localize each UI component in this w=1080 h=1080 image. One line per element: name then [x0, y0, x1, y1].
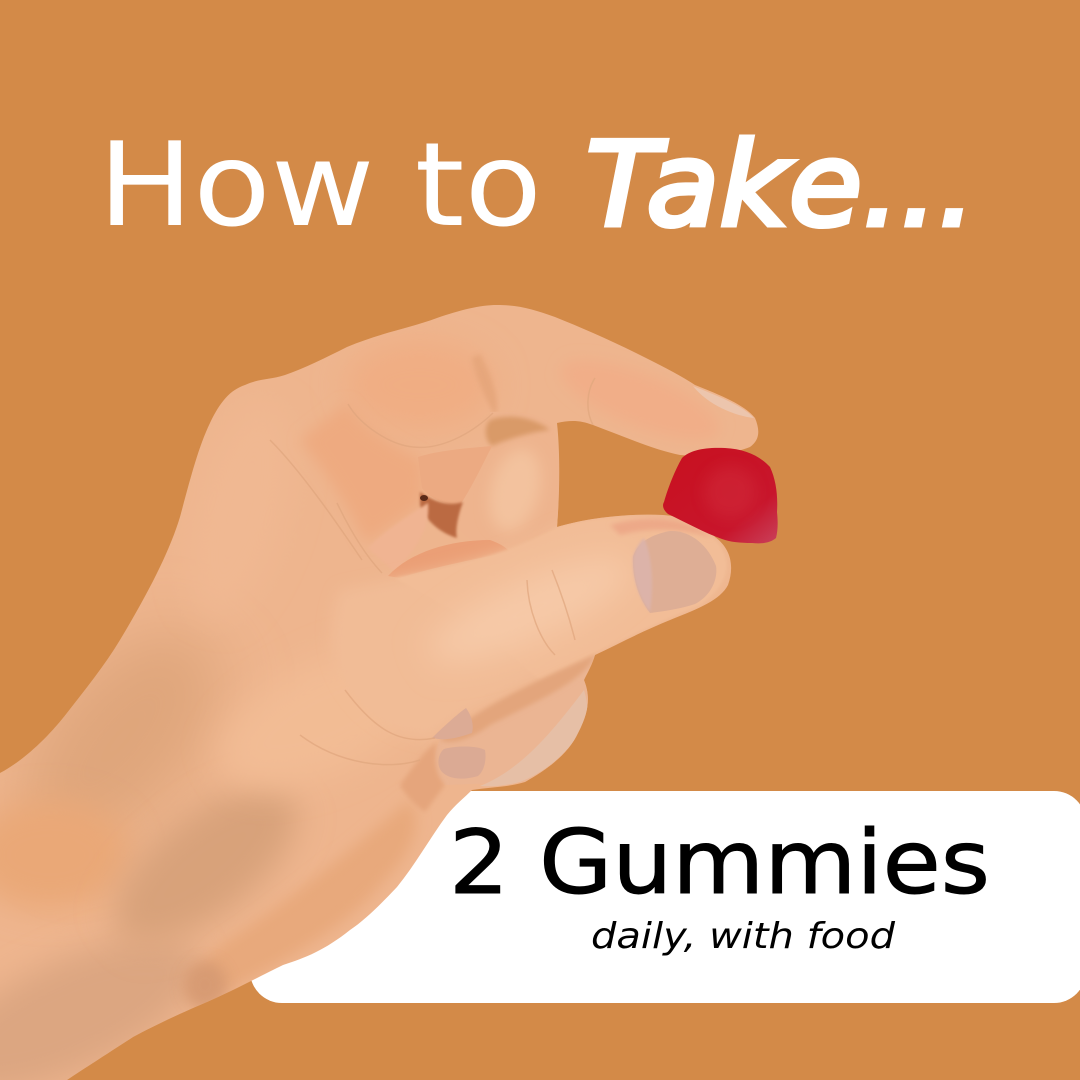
shadow above middle finger	[486, 417, 550, 446]
dosage heading: 2 Gummies	[449, 811, 990, 914]
fold finger	[421, 446, 490, 503]
panel: dosage card	[250, 791, 1080, 1003]
shading: knuckle	[360, 351, 479, 419]
shading: index finger	[551, 344, 729, 456]
shading: palm heel shadow	[111, 790, 299, 938]
thumb nail	[633, 531, 716, 613]
title: Take...	[586, 118, 976, 253]
middle finger highlight	[490, 451, 540, 529]
lower fingers	[400, 655, 595, 812]
gummy	[663, 448, 778, 543]
dosage subtext: daily, with food	[591, 916, 896, 957]
redraw: thumb upper edge over fingers	[398, 550, 510, 578]
shading: lower wrist	[0, 944, 194, 1080]
shading: thumb	[341, 516, 664, 710]
nail: little finger	[438, 746, 486, 779]
shadow beside nails	[400, 742, 445, 812]
curled fingers	[300, 403, 559, 578]
title	[98, 118, 976, 253]
dark gap	[420, 495, 428, 501]
shading: thumb tip pink	[612, 518, 706, 536]
shading: wrist crease	[183, 961, 227, 1009]
hollow	[420, 492, 463, 538]
shading: back of wrist	[23, 634, 218, 822]
title: How to	[98, 118, 542, 253]
shading: outer palm edge	[208, 805, 416, 989]
shading: wrist warm patch	[0, 800, 130, 910]
hand: shading layers	[0, 340, 754, 1080]
index nail	[693, 386, 754, 418]
palm crease lines	[270, 378, 595, 765]
shading: back of hand	[168, 392, 312, 628]
shadow under thumb	[440, 655, 595, 742]
ring finger base	[388, 540, 510, 578]
lower finger body	[525, 678, 588, 782]
shading: thumb light	[438, 560, 620, 661]
small finger base	[392, 502, 430, 530]
lower finger pale rim	[480, 690, 587, 786]
icon: hand holding gummy	[0, 305, 758, 1080]
nail: ring finger	[432, 708, 473, 739]
hand: base silhouette	[0, 305, 758, 1080]
middle finger	[492, 412, 558, 524]
knuckle mound	[306, 412, 422, 536]
shading: finger joint	[474, 356, 496, 412]
shading: palm light	[240, 746, 280, 778]
